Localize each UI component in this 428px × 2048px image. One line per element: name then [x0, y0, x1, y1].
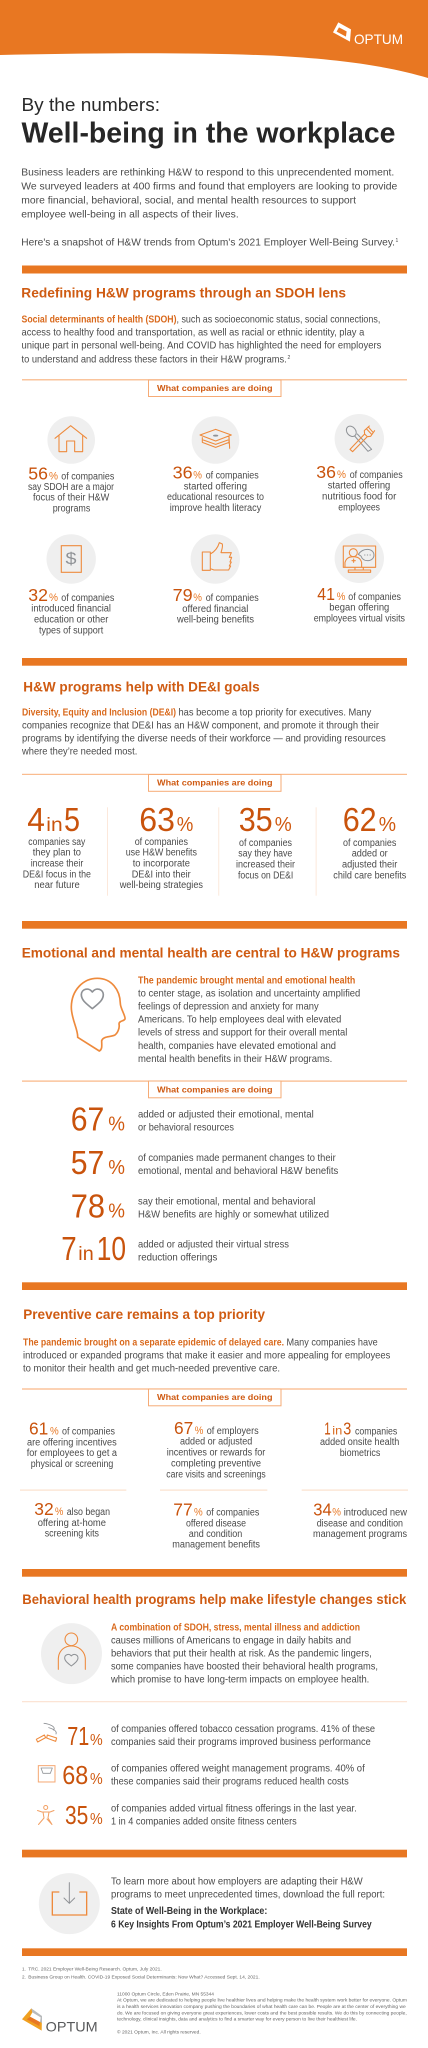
stat: 4 in 5: DE&I focus in the: [23, 869, 91, 880]
footnotes: TRC. 2021 Employer Well-Being Research. Optum, July 2021.: [28, 1967, 162, 1972]
stat: 4 in 5: near future: [34, 880, 80, 891]
stat: 41% with virtual visit icon: [314, 534, 405, 625]
stat: 71% tobacco: companies said their programs improved business performance: [111, 1737, 371, 1748]
stat: 1 in 3: 3: [343, 1418, 351, 1438]
stat: 61%: of companies: [62, 1426, 115, 1437]
stat: 34%: introduced new: [344, 1507, 408, 1518]
label: what companies are doing: What companies are doing: [157, 383, 272, 393]
footnotes: [22, 1967, 260, 1979]
emotional health paragraph: [138, 975, 360, 1065]
stat: 32% at-home kits: [34, 1499, 110, 1540]
label: what companies are doing: What companies are doing: [157, 778, 272, 788]
stat: 32% with dollar icon: 32: [28, 585, 48, 605]
call to action: To learn more about how employers are adapting their H&W: [111, 1876, 363, 1887]
behavioral health paragraph: behaviors that put their health at risk. As the pandemic lingers,: [111, 1649, 372, 1660]
stat: 78%: H&W benefits are highly or somewhat utilized: [138, 1209, 329, 1220]
section heading: DE&I: H&W programs help with DE&I goals: [23, 679, 260, 694]
call to action: 6 Key Insights From Optum’s 2021 Employer Well-Being Survey: [111, 1919, 372, 1930]
stat: 34%: disease and condition: [317, 1518, 403, 1529]
logo icon: Optum white: [333, 22, 351, 42]
DE&I paragraph: programs by identifying the diverse needs of their workforce — and providing resources: [22, 734, 386, 745]
stat: 56% with house icon: programs: [53, 504, 90, 515]
stat: 56% with house icon: focus of their H&W: [33, 493, 110, 504]
footnotes: 1.: [22, 1967, 26, 1972]
stat: 56% with house icon: say SDOH are a major: [28, 482, 115, 493]
footnotes: Business Group on Health. COVID-19 Exposed Social Determinants: Now What? Accessed Sept. 14, 2021.: [28, 1974, 260, 1979]
intro text: more financial, behavioral, social, and mental health resources to support: [21, 196, 356, 207]
stat: 7 in 10: in: [78, 1244, 94, 1265]
stat: 56% with house icon: 56: [28, 463, 48, 483]
icon: spoon and fork: [344, 424, 375, 452]
stat: 35% fitness: 1 in 4 companies added onsite fitness centers: [111, 1816, 297, 1827]
stat: 36% with utensils icon: %: [337, 469, 346, 481]
stat: 32% at-home kits: 32: [34, 1499, 54, 1519]
stat: 79% with thumbs up icon: offered financial: [182, 604, 248, 615]
DE&I paragraph: [21, 708, 386, 758]
stat: 77%: and condition: [189, 1529, 242, 1540]
company boilerplate: © 2021 Optum, Inc. All rights reserved.: [117, 2028, 201, 2034]
intro text: We surveyed leaders at 400 firms and found that employers are looking to provide: [21, 182, 398, 193]
stat: 35% fitness: [38, 1800, 357, 1830]
stat: 1 in 3: in: [332, 1423, 342, 1437]
stat: 32% at-home kits: offering at-home: [38, 1518, 106, 1529]
company boilerplate: is a health services innovation company pushing the boundaries of what health care can be. People are at the center of everything we: [117, 2004, 406, 2009]
stat: 67% of employers: 67: [174, 1418, 193, 1438]
stat: 32% at-home kits: also began: [67, 1507, 110, 1518]
stat: 41% with virtual visit icon: of companies: [348, 592, 401, 603]
stat: 36% with utensils icon: employees: [338, 502, 380, 513]
stat: 1 in 3: [320, 1418, 399, 1459]
stat: 32% with dollar icon: introduced financial: [31, 604, 111, 615]
stat: 77%: offered disease: [186, 1518, 246, 1529]
stat: 63%: DE&I into their: [132, 869, 191, 880]
stat: 7 in 10: reduction offerings: [138, 1253, 217, 1264]
footer logo: [22, 2008, 98, 2035]
stat: 71% tobacco: [36, 1721, 375, 1751]
preventive care paragraph: The pandemic brought on a separate epidemic of delayed care.: [23, 1337, 284, 1348]
stat: 36% with graduation cap icon: [167, 416, 264, 514]
preventive care paragraph: [23, 1337, 390, 1374]
stat: 57%: 57: [71, 1144, 104, 1181]
preventive care paragraph: introduced or expanded programs that make it easier and more appealing for employees: [23, 1350, 390, 1361]
icon: fitness figure: [38, 1806, 54, 1824]
stat: 36% with utensils icon: 36: [316, 462, 336, 482]
stat: 57%: %: [108, 1157, 125, 1179]
section heading: preventive care: Preventive care remains a top priority: [23, 1307, 265, 1322]
stat: 4 in 5: [23, 801, 91, 891]
stat: 36% with utensils icon: of companies: [350, 470, 403, 481]
stat: 36% with graduation cap icon: educational resources to: [167, 492, 264, 503]
stat: 34%: management programs: [313, 1529, 407, 1540]
stat: 36% with graduation cap icon: improve health literacy: [170, 503, 261, 514]
stat: 35% fitness: %: [90, 1811, 103, 1828]
DE&I paragraph: Diversity, Equity and Inclusion (DE&I): [22, 708, 176, 719]
stat: 35%: focus on DE&I: [238, 870, 293, 881]
title: Well-being in the workplace: [22, 118, 396, 150]
icon: thumbs up: [202, 543, 232, 570]
stat: 62%: 62: [343, 801, 377, 838]
stat: 62%: [333, 801, 406, 881]
stat: 61%: %: [50, 1425, 59, 1437]
stat: 36% with graduation cap icon: of companies: [206, 471, 259, 482]
stat: 79% with thumbs up icon: [173, 534, 259, 626]
stat: 61%: 61: [29, 1418, 48, 1438]
SDOH paragraph: 2: [288, 355, 290, 361]
header band with logo: OPTUM: [354, 31, 403, 47]
behavioral health paragraph: A combination of SDOH, stress, mental illness and addiction: [111, 1622, 360, 1633]
stat: 34%: [313, 1499, 408, 1540]
stat: 63%: well-being strategies: [119, 880, 203, 891]
stat: 68% weight: of companies offered weight management programs. 40% of: [111, 1764, 365, 1775]
stat: 78%: say their emotional, mental and behavioral: [138, 1196, 315, 1207]
stat: 34%: %: [332, 1506, 341, 1518]
stat: 63%: 63: [139, 801, 175, 838]
stat: 67%: [71, 1100, 314, 1137]
stat: 63%: of companies: [135, 837, 188, 848]
stat: 41% with virtual visit icon: began offering: [329, 603, 389, 614]
stat: 32% with dollar icon: [28, 534, 114, 636]
preventive care paragraph: to monitor their health and get much-needed preventive care.: [23, 1363, 280, 1374]
stat: 62%: adjusted their: [342, 860, 398, 871]
stat: 41% with virtual visit icon: %: [337, 591, 345, 603]
stat: 67%: %: [108, 1113, 125, 1135]
icon: broken cigarette: [36, 1723, 57, 1742]
stat: 77%: management benefits: [172, 1540, 260, 1551]
stat: 35%: [236, 801, 296, 881]
stat: 77%: %: [194, 1506, 203, 1518]
stat: 32% with dollar icon: %: [49, 592, 58, 604]
stat: 36% with graduation cap icon: 36: [173, 463, 193, 483]
DE&I paragraph: has become a top priority for executives. Many: [178, 708, 372, 719]
stat: 77%: of companies: [206, 1507, 259, 1518]
stat: 57%: [71, 1144, 338, 1181]
intro text: 1: [396, 238, 398, 244]
stat: 62%: %: [379, 814, 396, 836]
label: what companies are doing: [22, 1388, 407, 1406]
stat: 1 in 3: biometrics: [340, 1448, 380, 1459]
label: what companies are doing: [22, 1080, 407, 1098]
stat: 36% with graduation cap icon: started offering: [184, 481, 247, 492]
SDOH paragraph: unique part in personal well-being. And COVID has highlighted the need for employers: [22, 341, 381, 352]
stat: 68% weight: [38, 1760, 365, 1790]
stat: 79% with thumbs up icon: well-being benefits: [176, 615, 254, 626]
stat: 63%: to incorporate: [133, 858, 190, 869]
stat: 56% with house icon: [28, 416, 115, 515]
section heading: SDOH: Redefining H&W programs through an SDOH lens: [21, 286, 346, 301]
emotional health paragraph: health, companies have elevated emotional and: [138, 1041, 336, 1052]
stat: 1 in 3: 1: [324, 1418, 331, 1438]
stat: 4 in 5: in: [46, 815, 63, 836]
stat: 79% with thumbs up icon: 79: [173, 585, 193, 605]
title: By the numbers:: [22, 94, 160, 115]
preventive care paragraph: Many companies have: [286, 1337, 378, 1348]
stat: 32% with dollar icon: types of support: [39, 625, 104, 636]
stat: 77%: 77: [173, 1499, 193, 1519]
stat: 79% with thumbs up icon: of companies: [206, 593, 259, 604]
stat: 36% with utensils icon: nutritious food for: [322, 491, 397, 502]
stat: 32% at-home kits: screening kits: [45, 1529, 99, 1540]
stat: 78%: %: [108, 1200, 125, 1222]
behavioral health paragraph: some companies have boosted their behavioral health programs,: [111, 1662, 378, 1673]
intro text: employee well-being in all aspects of their lives.: [21, 209, 239, 220]
emotional health paragraph: Americans. To help employees deal with elevated: [138, 1015, 341, 1026]
behavioral health paragraph: [110, 1622, 378, 1686]
intro text: Here's a snapshot of H&W trends from Optum's 2021 Employer Well-Being Survey.: [21, 237, 395, 248]
stat: 1 in 3: companies: [355, 1426, 397, 1437]
stat: 61%: for employees to get a: [27, 1448, 118, 1459]
stat: 4 in 5: 4: [27, 801, 45, 838]
company boilerplate: At Optum, we are dedicated to helping people live healthier lives and helping make the health system work better for everyone. Optum: [117, 1998, 407, 2003]
DE&I paragraph: where they’re needed most.: [21, 747, 137, 758]
stat: 1 in 3: added onsite health: [320, 1437, 399, 1448]
stat: 62%: child care benefits: [333, 870, 406, 881]
stat: 56% with house icon: of companies: [61, 471, 114, 482]
stat: 35% fitness: of companies added virtual fitness offerings in the last year.: [111, 1803, 357, 1814]
icon: download: [39, 1873, 100, 1934]
stat: 57%: of companies made permanent changes to their: [138, 1153, 336, 1164]
stat: 67%: or behavioral resources: [138, 1123, 234, 1134]
SDOH paragraph: [22, 315, 381, 365]
icon: scale: [38, 1766, 55, 1782]
DE&I paragraph: companies recognize that DE&I has an H&W component, and promote it through their: [22, 721, 379, 732]
stat: 35%: %: [275, 814, 292, 836]
icon: head with heart: [71, 978, 125, 1051]
label: what companies are doing: What companies are doing: [157, 1392, 272, 1402]
stat: 32% at-home kits: %: [55, 1506, 63, 1518]
icon: person with heart: [41, 1623, 102, 1684]
stat: 67% of employers: [166, 1418, 266, 1480]
stat: 4 in 5: they plan to: [33, 848, 81, 859]
stat: 71% tobacco: of companies offered tobacco cessation programs. 41% of these: [111, 1724, 375, 1735]
emotional health paragraph: The pandemic brought mental and emotional health: [138, 975, 355, 986]
stat: 35%: increased their: [236, 860, 296, 871]
stat: 36% with graduation cap icon: %: [193, 470, 202, 482]
label: what companies are doing: [22, 379, 407, 396]
title: [22, 94, 396, 150]
stat: 67%: added or adjusted their emotional, mental: [138, 1110, 314, 1121]
stat: 32% with dollar icon: education or other: [34, 614, 109, 625]
stat: 7 in 10: [61, 1230, 289, 1267]
stat: 67% of employers: of employers: [207, 1426, 259, 1437]
footnotes: 2.: [22, 1974, 26, 1979]
stat: 61%: [27, 1418, 118, 1470]
stat: 68% weight: %: [90, 1771, 103, 1788]
icon: virtual visit monitor: [343, 546, 376, 572]
label: what companies are doing: [22, 774, 407, 791]
header band with logo: [0, 0, 428, 78]
stat: 63%: %: [177, 814, 193, 836]
icon: graduation cap: [200, 429, 231, 448]
stat: 62%: of companies: [343, 838, 396, 849]
SDOH paragraph: access to healthy food and transportation, as well as racial or ethnic identity, play a: [22, 328, 364, 339]
stat: 35%: 35: [239, 801, 273, 838]
intro text: Business leaders are rethinking H&W to respond to this unprecendented moment.: [21, 168, 394, 179]
stat: 4 in 5: increase their: [31, 858, 84, 869]
stat: 7 in 10: 10: [97, 1230, 126, 1267]
company boilerplate: 11000 Optum Circle, Eden Prairie, MN 55344: [117, 1991, 214, 1996]
stat: 78%: [71, 1187, 329, 1224]
stat: 67% of employers: incentives or rewards for: [167, 1448, 266, 1459]
stat: 63%: [119, 801, 203, 891]
stat: 36% with utensils icon: started offering: [328, 481, 390, 492]
stat: 62%: added or: [352, 849, 388, 860]
section heading: behavioral health: Behavioral health programs help make lifestyle changes stick: [22, 1592, 407, 1607]
stat: 68% weight: these companies said their programs reduced health costs: [111, 1777, 349, 1788]
stat: 35%: say they have: [238, 849, 292, 860]
stat: 63%: use H&W benefits: [126, 848, 197, 859]
emotional health paragraph: mental health benefits in their H&W programs.: [138, 1054, 332, 1065]
call to action: State of Well-Being in the Workplace:: [111, 1906, 267, 1917]
icon: house: [55, 426, 87, 452]
stat: 32% with dollar icon: of companies: [61, 593, 114, 604]
stat: 78%: 78: [71, 1187, 105, 1224]
SDOH paragraph: to understand and address these factors in their H&W programs.: [22, 354, 287, 365]
company boilerplate: [117, 1991, 407, 2034]
footer logo: OPTUM: [46, 2019, 98, 2035]
call to action: [111, 1876, 385, 1930]
stat: 57%: emotional, mental and behavioral H&W benefits: [138, 1166, 338, 1177]
stat: 34%: 34: [313, 1499, 332, 1519]
stat: 71% tobacco: 71: [67, 1721, 89, 1751]
stat: 68% weight: 68: [62, 1760, 88, 1790]
stat: 7 in 10: 7: [61, 1230, 77, 1267]
call to action: programs to meet unprecedented times, download the full report:: [111, 1890, 385, 1901]
stat: 36% with utensils icon: [316, 414, 403, 513]
stat: 61%: physical or screening: [31, 1459, 113, 1470]
stat: 41% with virtual visit icon: employees virtual visits: [314, 614, 405, 625]
stat: 67% of employers: care visits and screenings: [166, 1469, 266, 1480]
company boilerplate: technology, clinical insights, data and analytics to find a smarter way for every person to live their healthiest life.: [117, 2017, 357, 2022]
stat: 35% fitness: 35: [65, 1800, 88, 1830]
stat: 67% of employers: completing preventive: [171, 1459, 261, 1470]
emotional health paragraph: levels of stress and support for their overall mental: [138, 1028, 347, 1039]
stat: 41% with virtual visit icon: 41: [317, 584, 335, 604]
stat: 4 in 5: companies say: [28, 837, 85, 848]
SDOH paragraph: , such as socioeconomic status, social connections,: [176, 315, 380, 326]
intro text: [21, 168, 399, 248]
company boilerplate: do. We are focused on giving everyone great experiences, lower costs and the best possible results. We do this by connecting people,: [117, 2010, 407, 2015]
emotional health paragraph: to center stage, as isolation and uncertainty amplified: [138, 988, 360, 999]
stat: 35%: of companies: [239, 838, 292, 849]
behavioral health paragraph: causes millions of Americans to engage in daily habits and: [111, 1636, 351, 1647]
stat: 71% tobacco: %: [90, 1732, 103, 1749]
stat: 61%: are offering incentives: [27, 1437, 117, 1448]
stat: 67%: 67: [71, 1100, 104, 1137]
emotional health paragraph: feelings of depression and anxiety for many: [138, 1002, 319, 1013]
stat: 4 in 5: 5: [64, 801, 80, 838]
stat: 7 in 10: added or adjusted their virtual stress: [138, 1240, 289, 1251]
stat: 77%: [172, 1499, 260, 1551]
section heading: emotional health: Emotional and mental health are central to H&W programs: [22, 945, 400, 960]
stat: 67% of employers: %: [195, 1425, 203, 1437]
icon: dollar card: $: [66, 549, 77, 568]
stat: 79% with thumbs up icon: %: [193, 592, 202, 604]
behavioral health paragraph: which promise to have long-term impacts on employee health.: [110, 1675, 369, 1686]
label: what companies are doing: What companies are doing: [157, 1084, 272, 1094]
stat: 56% with house icon: %: [49, 470, 58, 482]
stat: 67% of employers: added or adjusted: [180, 1437, 252, 1448]
SDOH paragraph: Social determinants of health (SDOH): [22, 315, 176, 326]
